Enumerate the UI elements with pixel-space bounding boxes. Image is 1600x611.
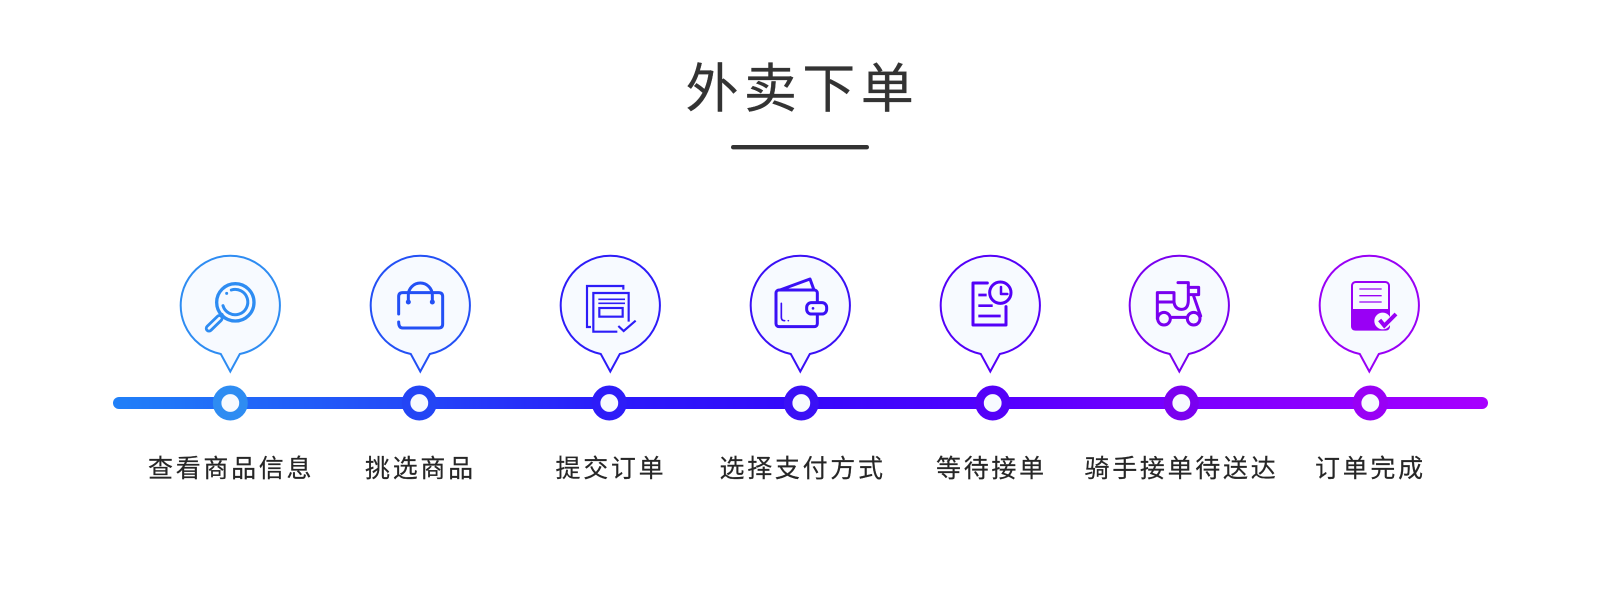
icon: magnifying glass [209, 284, 254, 328]
label 3: 提交订单 [556, 455, 666, 483]
step 6: 骑手接单待送达 [1084, 256, 1278, 483]
timeline node 6 [1168, 390, 1195, 416]
label 5: 等待接单 [936, 455, 1047, 483]
step 1: 查看商品信息 [148, 256, 314, 483]
label 4: 选择支付方式 [720, 455, 886, 483]
speech bubble 5 [941, 256, 1040, 372]
speech bubble 2 [371, 256, 470, 372]
timeline bar [113, 397, 1488, 409]
step 3: 提交订单 [556, 256, 666, 483]
title underline [731, 145, 869, 149]
icon: delivery scooter [1157, 283, 1201, 325]
icon: document with clock [973, 282, 1011, 325]
icon: completed order [1351, 282, 1396, 331]
speech bubble 6 [1130, 256, 1229, 372]
label 1: 查看商品信息 [148, 455, 314, 483]
timeline node 1 [217, 390, 244, 416]
step 7: 订单完成 [1315, 256, 1426, 483]
speech bubble 4 [751, 256, 850, 372]
speech bubble 1 [181, 256, 280, 372]
speech bubble 3 [561, 256, 660, 372]
step 5: 等待接单 [936, 256, 1047, 483]
timeline node 5 [980, 390, 1006, 416]
icon: wallet [776, 279, 827, 327]
label 6: 骑手接单待送达 [1084, 455, 1278, 483]
icon: order document [587, 286, 636, 332]
step 2: 挑选商品 [365, 256, 476, 483]
icon: shopping bag [399, 283, 443, 328]
timeline node 2 [406, 390, 432, 416]
step 4: 选择支付方式 [720, 256, 886, 483]
timeline node 3 [596, 390, 622, 416]
speech bubble 7 [1320, 256, 1419, 372]
timeline node 7 [1357, 390, 1384, 416]
label 2: 挑选商品 [365, 455, 476, 483]
title: 外卖下单 [686, 60, 919, 119]
label 7: 订单完成 [1315, 455, 1426, 483]
timeline node 4 [788, 390, 814, 416]
